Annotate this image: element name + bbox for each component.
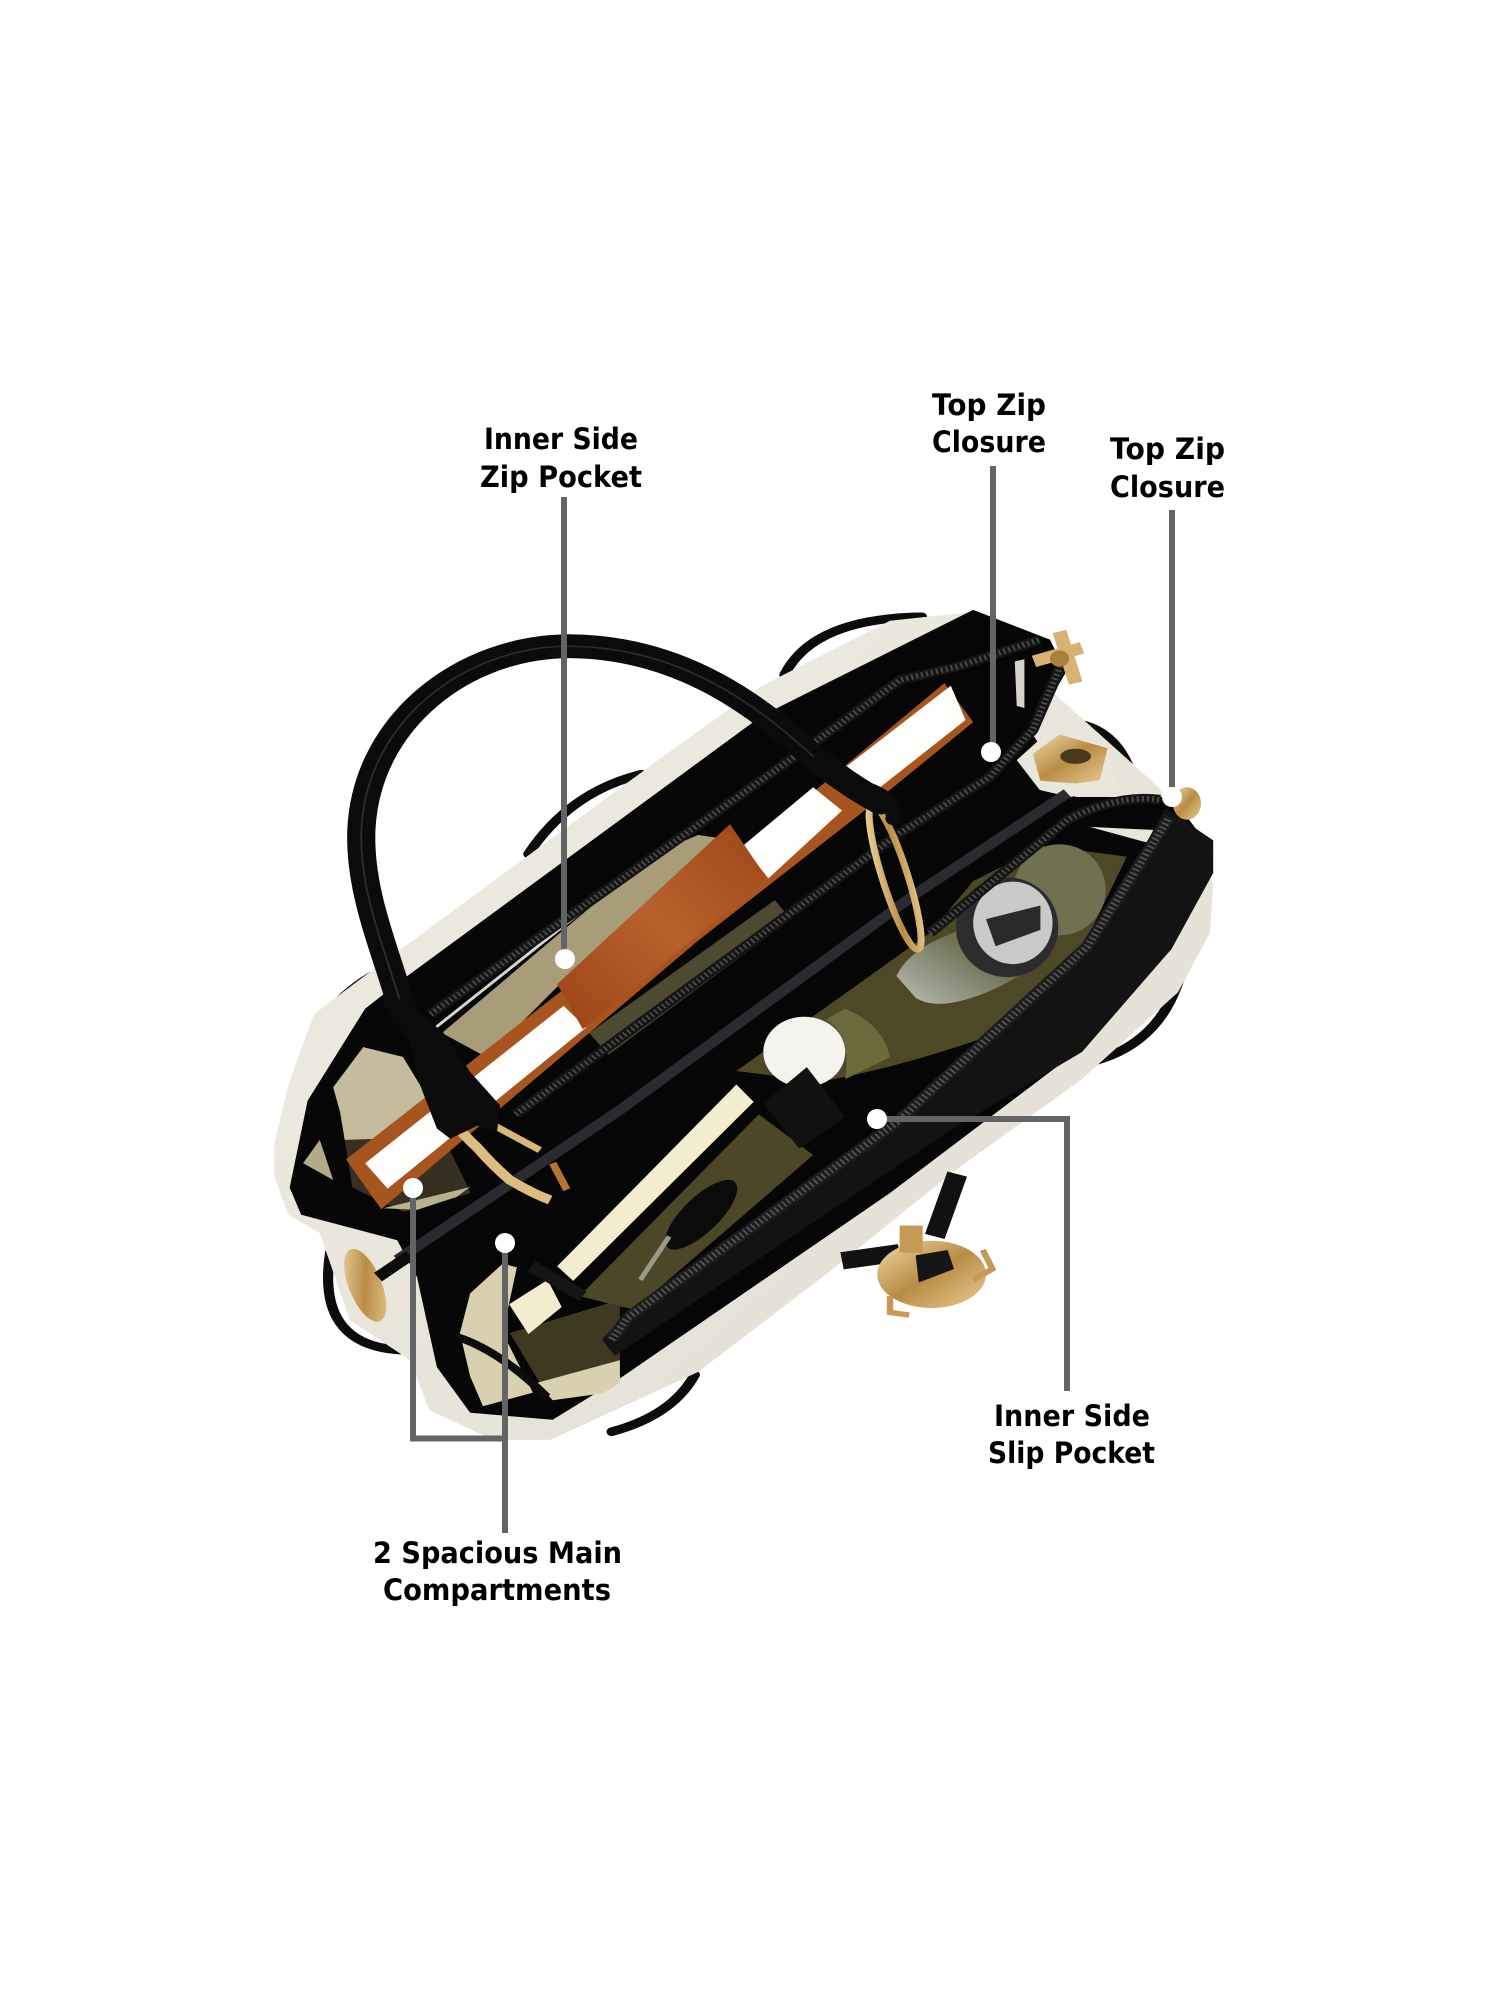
slim book strap (532, 1266, 583, 1296)
clasp cross top (1034, 632, 1082, 683)
marker dot right (495, 1233, 515, 1253)
label text: Zip Pocket (480, 460, 642, 494)
compartment zipper (930, 799, 1160, 933)
black bag interior (290, 610, 1213, 1420)
label text: Closure (932, 425, 1046, 459)
callout: inner side slip pocket (867, 1109, 1155, 1470)
marker dot (981, 742, 1001, 762)
lining under book (383, 1187, 470, 1210)
clasp stud top (1050, 651, 1069, 667)
perfume glass (1014, 844, 1106, 935)
gold clasp right (1173, 787, 1201, 820)
gold clasp top (1034, 632, 1082, 683)
label text (932, 388, 1046, 459)
perfume label mark (986, 906, 1040, 946)
gold ring lower (447, 1113, 567, 1200)
white bottle top (763, 1017, 845, 1087)
clasp body left (336, 1245, 395, 1326)
label text (373, 1536, 622, 1607)
leader line (1169, 510, 1175, 787)
leader lines (413, 1188, 505, 1533)
handle lower tab (380, 999, 500, 1139)
slim book pages (509, 1280, 562, 1334)
upper lining (442, 835, 736, 1057)
marker dot (555, 949, 575, 969)
top handle (361, 646, 893, 1139)
gold clasp centre (1033, 735, 1108, 783)
marker dot (867, 1109, 887, 1129)
clasp body centre (1033, 735, 1108, 783)
gold clasp left (336, 1245, 410, 1326)
left lining (333, 1047, 443, 1140)
callout: top zip closure right (1110, 432, 1225, 807)
label text: Slip Pocket (988, 1436, 1155, 1470)
label text: Inner Side (484, 422, 638, 456)
zip pocket edge (436, 906, 589, 1028)
ring lower arc (447, 1113, 550, 1200)
label text: Top Zip (932, 388, 1046, 422)
perfume label (956, 877, 1058, 977)
twist lock clasp (842, 1174, 992, 1315)
sunglasses arm (640, 1236, 669, 1280)
zip pocket lining gap (589, 900, 791, 1055)
right compartment lining (736, 846, 1127, 1082)
label text (988, 1399, 1155, 1470)
middle zipper (516, 667, 1060, 1114)
label text: Compartments (383, 1573, 611, 1607)
label text: 2 Spacious Main (373, 1536, 622, 1570)
diary book (346, 683, 973, 1209)
compartment zipper teeth (930, 799, 1160, 933)
label text: Closure (1110, 470, 1225, 504)
lock top (900, 1226, 923, 1253)
handle upper tab (845, 783, 893, 819)
leather strap (557, 824, 767, 1029)
lower pale lining (460, 1264, 533, 1406)
handbag illustration (274, 610, 1213, 1440)
book pages (365, 1006, 586, 1189)
book brown cover (346, 683, 973, 1209)
clasp hole centre (1060, 749, 1091, 764)
right zipper fabric (602, 808, 1213, 1356)
book pages top (842, 686, 966, 800)
cream slit (1015, 659, 1024, 708)
sunglasses (640, 1171, 749, 1280)
perfume label centre (973, 882, 1053, 964)
leader line (561, 497, 567, 959)
right zipper (612, 817, 1170, 1340)
slim book (509, 1085, 754, 1334)
handle highlight (361, 646, 813, 1014)
marker dot left (403, 1178, 423, 1198)
perfume bottle (896, 844, 1106, 1004)
lower strap (457, 1337, 547, 1397)
perfume glass base (896, 899, 1056, 1004)
lock holes (916, 1250, 954, 1283)
label text: Top Zip (1110, 432, 1225, 466)
cream wedge (1090, 827, 1157, 843)
label text (480, 422, 642, 494)
outer strap loops (295, 617, 1186, 1432)
lower dark lining (510, 1300, 620, 1383)
gold ring upper (860, 802, 930, 952)
left lining shadow (340, 1113, 471, 1212)
zippers (430, 640, 1170, 1340)
lower cream lining (537, 1360, 620, 1400)
right zipper teeth (612, 817, 1170, 1340)
book pages middle (743, 787, 842, 878)
wall highlights (397, 793, 1067, 1260)
lock body (877, 1241, 986, 1308)
bottle neck (826, 1009, 890, 1079)
lock feet (890, 1250, 992, 1315)
black cap (763, 1067, 845, 1149)
lock straps (842, 1174, 957, 1261)
cream bag body (274, 613, 1213, 1440)
left lining small (303, 1140, 333, 1180)
upper zipper (430, 640, 1040, 1014)
clasp strap left (378, 1255, 410, 1277)
handle arch (361, 646, 880, 1014)
leader line (877, 1119, 1067, 1391)
marker dot (1162, 787, 1182, 807)
clasp cream patch (1017, 733, 1117, 797)
label text: Inner Side (994, 1399, 1150, 1433)
ring copper tip (553, 1163, 567, 1190)
lower olive area (580, 1114, 813, 1310)
ring lower back arc (484, 1120, 540, 1150)
label text (1110, 432, 1225, 504)
callout: top zip closure centre (932, 388, 1046, 762)
sunglasses lens (654, 1171, 749, 1258)
middle zipper teeth (516, 667, 1060, 1114)
slim book edge (557, 1085, 754, 1281)
callout: inner side zip pocket (480, 422, 642, 969)
leader line (990, 466, 996, 752)
callout: 2 spacious main compartments (373, 1178, 622, 1607)
upper zipper teeth (430, 640, 1040, 1014)
